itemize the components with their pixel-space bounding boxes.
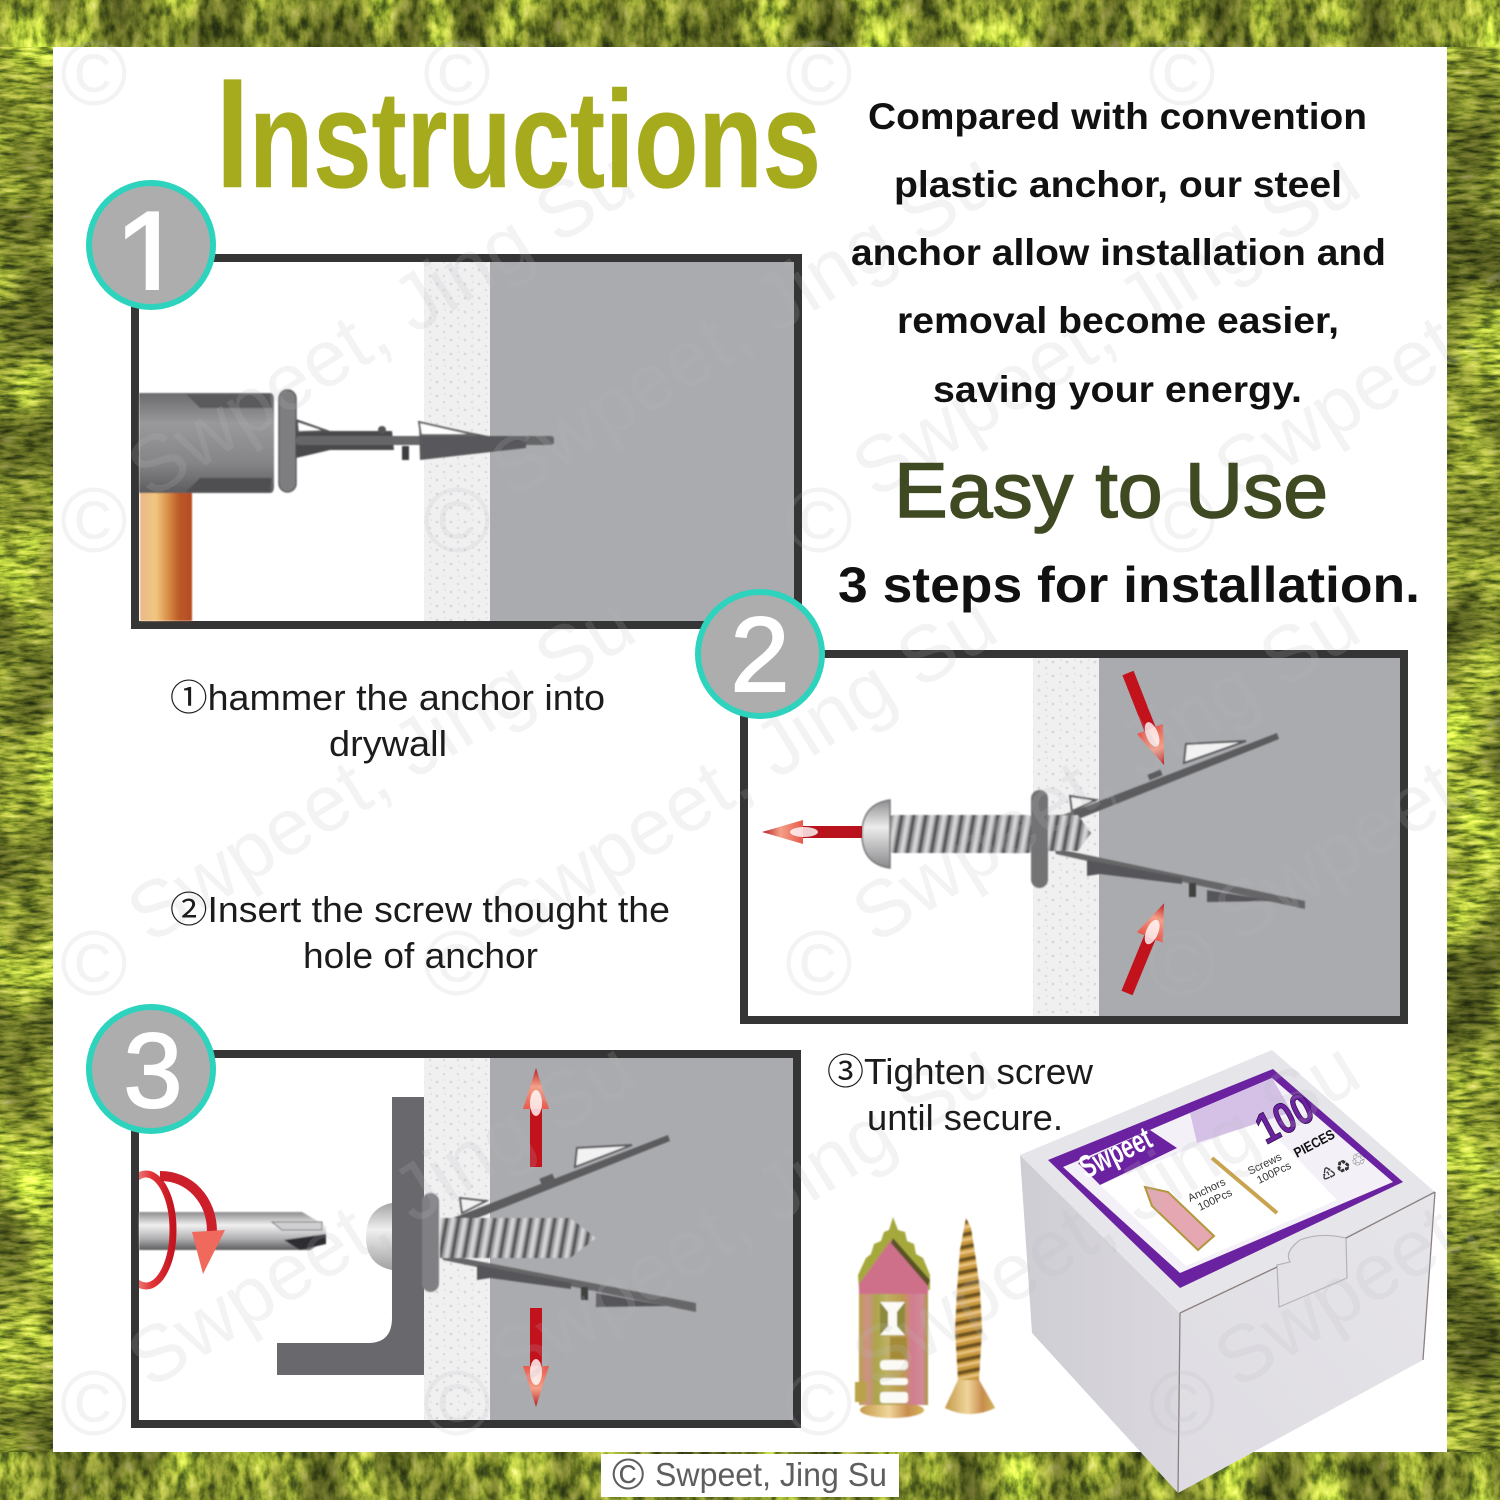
watermark layer: Swpeet, Jing Su [837,578,1374,959]
watermark layer: © [60,470,128,572]
panel 3 drywall [424,1058,490,1420]
label white card [1100,1120,1337,1266]
step 2 caption: ②Insert the screw thought the [170,889,670,930]
box tab [1277,1235,1347,1307]
watermark layer: © [785,913,853,1015]
watermark layer: Swpeet, Jing Su [474,578,1011,959]
watermark layer: Swpeet, Jing Su [112,578,649,959]
intro text block: removal become easier, [897,300,1339,341]
screws count: 100Pcs [1255,1160,1294,1187]
brand name: Swpeet [1073,1120,1158,1185]
arrow: arm opening up [1115,668,1177,770]
pieces word: PIECES [1291,1126,1337,1161]
watermark layer: Swpeet, Jing Su [837,1023,1374,1404]
watermark layer: © [785,1353,853,1455]
panel 3 wall cavity [490,1058,793,1420]
step 2 caption [170,889,670,976]
box left face [1020,1155,1180,1493]
box top face [1020,1050,1435,1313]
screws label: Screws [1246,1151,1284,1178]
watermark layer: © [423,1353,491,1455]
watermark layer: Swpeet, Jing Su [112,133,649,514]
step 3 caption: until secure. [867,1097,1063,1138]
anchor arms expanded [1050,733,1305,909]
arrow: arm opening down [1114,898,1177,998]
step badge 3 [89,1007,213,1131]
screw [862,790,1091,888]
panel 1 frame [135,258,798,625]
anchors label: Anchors [1186,1176,1228,1205]
100 pieces: 100 [1248,1083,1322,1154]
intro text block: plastic anchor, our steel [894,164,1342,205]
watermark layer: © [1148,1353,1216,1455]
panel 1 drywall [424,262,490,621]
panel: step 2 insert the screw [744,654,1404,1020]
title: Instructions [216,47,821,221]
product: anchor photo [855,1217,930,1418]
box right face [1178,1192,1435,1493]
panel 2 drywall [1033,658,1099,1016]
label lilac band [1190,1078,1292,1143]
step badge 1: 1 [113,184,187,331]
watermark layer: © [785,470,853,572]
watermark layer: © [60,1353,128,1455]
copyright strip: Swpeet, Jing Su [655,1456,887,1493]
intro text block [851,96,1386,410]
screw head [366,1203,392,1270]
watermark layer: © [60,913,128,1015]
arrow: arm pressing up [523,1068,549,1167]
label anchor image [1145,1187,1214,1250]
L bracket [277,1097,424,1375]
watermark layer: © [423,470,491,572]
label screw image [1212,1158,1277,1213]
copyright strip [601,1450,899,1499]
step 3 caption [827,1051,1094,1138]
watermark layer: © [423,913,491,1015]
copyright strip: © [612,1450,644,1499]
product: box [1020,1050,1435,1493]
panel 2 frame [744,654,1404,1020]
watermark layer: Swpeet, Jing Su [112,1023,649,1404]
arrow: pull screw left [762,820,862,844]
step 1 caption: ①hammer the anchor into [170,677,605,718]
intro text block: saving your energy. [933,369,1302,410]
watermark layer: © [423,23,491,125]
watermark layer: © [785,23,853,125]
watermark layer: Swpeet, Jing Su [837,133,1374,514]
watermark layer: © [1148,913,1216,1015]
intro text block: anchor allow installation and [851,232,1386,273]
anchors count: 100Pcs [1196,1187,1235,1214]
step 1 caption [170,677,605,764]
heading: easy to use: Easy to Use [894,446,1328,534]
label brand tab [1078,1130,1177,1185]
panel: step 1 hammer the anchor [135,258,798,625]
watermark layer: © [60,23,128,125]
hammer [139,393,274,621]
screwdriver bit [139,1212,326,1250]
step 2 caption: hole of anchor [303,935,538,976]
watermark layer: © [1148,23,1216,125]
box purple label [1048,1069,1403,1288]
box edge lines [1178,1192,1435,1493]
subheading: 3 steps: 3 steps for installation. [838,557,1420,613]
recycling marks: ♳ ♻ ♲ [1319,1150,1367,1183]
watermark layer: Swpeet, Jing Su [474,1023,1011,1404]
step badge 2 [698,592,822,716]
panel 3 frame [135,1054,797,1424]
step 3 caption: ③Tighten screw [827,1051,1094,1092]
arrow: arm pressing down [523,1308,549,1407]
product: screw photo [945,1218,995,1414]
panel 1 wall cavity [490,262,794,621]
watermark layer: Swpeet, Jing Su [474,133,1011,514]
step badge 2: 2 [731,596,789,714]
panel 2 wall cavity [1099,658,1400,1016]
step badge 3: 3 [124,1012,182,1130]
watermark layer: © [1148,470,1216,572]
panel: step 3 tighten screw [119,1054,797,1424]
anchor arms and screw in wall [422,1135,696,1312]
step 1 caption: drywall [329,723,447,764]
step badge 1 [89,183,213,331]
intro text block: Compared with convention [868,96,1367,137]
arrow: rotation around bit [139,1170,225,1290]
label inner panel [1063,1078,1393,1273]
anchor in step 1 [279,390,554,492]
